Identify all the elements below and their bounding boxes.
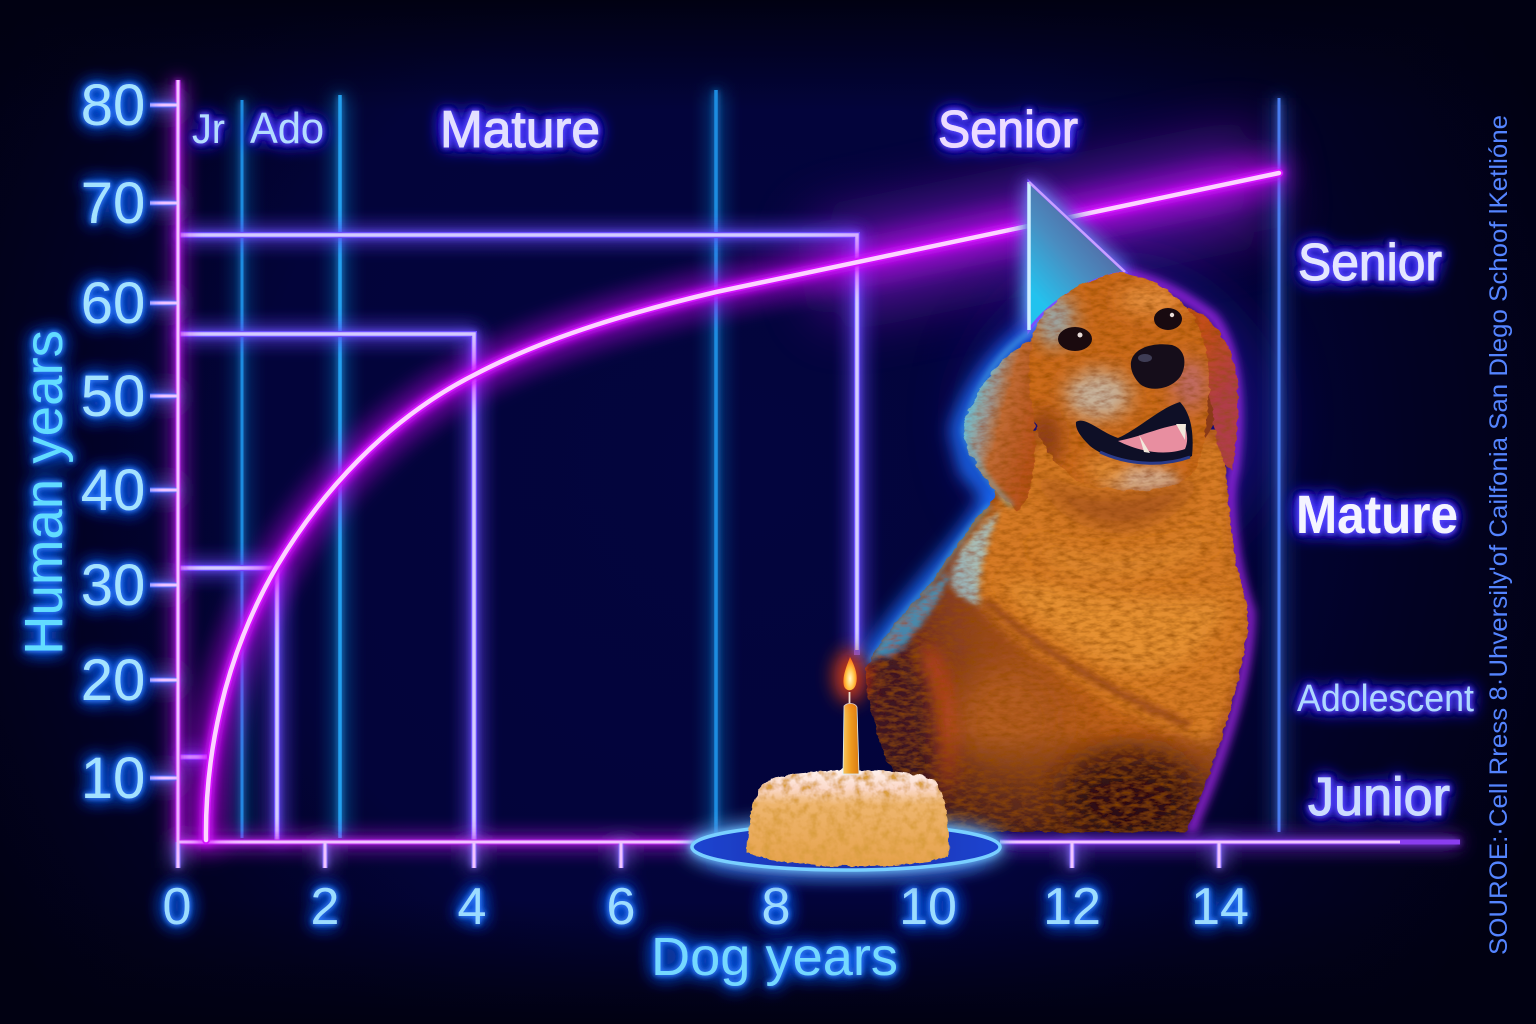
dog body bbox=[865, 430, 1249, 834]
right ear bbox=[1187, 308, 1238, 470]
age bracket lines bbox=[178, 235, 857, 840]
right stage labels: Senior bbox=[1298, 234, 1442, 292]
right stage labels: Junior bbox=[1308, 767, 1450, 827]
dog head bbox=[963, 265, 1238, 510]
x axis numbers: 14 bbox=[1191, 878, 1249, 936]
x axis numbers: 2 bbox=[311, 878, 339, 936]
top stage labels bbox=[192, 101, 1078, 159]
dog with party hat bbox=[850, 182, 1270, 843]
cake on plate bbox=[692, 650, 1000, 878]
x axis numbers: 10 bbox=[899, 878, 957, 936]
eye left bbox=[1058, 327, 1092, 351]
rim glow: blue on left bbox=[868, 273, 1120, 665]
axes bbox=[150, 80, 1460, 868]
top stage labels: Jr bbox=[192, 105, 225, 152]
y axis numbers: 40 bbox=[81, 458, 145, 523]
y axis numbers: 70 bbox=[81, 171, 145, 236]
party hat bbox=[1029, 182, 1125, 330]
right stage labels: Mature bbox=[1296, 485, 1458, 545]
top stage labels: Ado bbox=[250, 104, 324, 153]
x axis title: Dog years bbox=[651, 927, 898, 987]
nose bbox=[1131, 344, 1184, 389]
right stage labels bbox=[1296, 234, 1474, 827]
head backing bbox=[1030, 315, 1220, 475]
y axis numbers: 10 bbox=[81, 746, 145, 811]
y axis numbers: 30 bbox=[81, 553, 145, 618]
rim glow: purple on right bbox=[1120, 273, 1250, 832]
pale rim on left ear and shoulder bbox=[870, 332, 1030, 662]
x axis numbers: 6 bbox=[607, 878, 635, 936]
purple haze along curve bbox=[820, 180, 1265, 272]
y axis numbers: 20 bbox=[81, 648, 145, 713]
x axis numbers: 12 bbox=[1043, 878, 1101, 936]
cake body bbox=[747, 770, 949, 866]
y axis title: Human years bbox=[14, 330, 74, 655]
mouth bbox=[1076, 402, 1193, 464]
top vignette bbox=[0, 0, 1536, 110]
x axis numbers: 4 bbox=[458, 878, 486, 936]
plate bbox=[692, 824, 1000, 878]
y axis numbers bbox=[81, 73, 145, 811]
x axis numbers bbox=[163, 878, 1249, 936]
x axis numbers: 0 bbox=[163, 878, 191, 936]
top stage labels: Senior bbox=[938, 101, 1078, 159]
source note: SOUROE:·Cell Rress 8·Uhversily'of Cailfonia San Dlego Schoof lKetlióne bbox=[1485, 115, 1513, 955]
left ear bbox=[963, 335, 1042, 510]
x axis numbers: 8 bbox=[762, 878, 790, 936]
eye right bbox=[1154, 308, 1182, 330]
y axis numbers: 50 bbox=[81, 364, 145, 429]
aging curve bbox=[206, 173, 1279, 840]
top stage labels: Mature bbox=[440, 101, 600, 159]
candle bbox=[843, 703, 859, 774]
right stage labels: Adolescent bbox=[1297, 678, 1474, 720]
flame bbox=[834, 650, 866, 703]
blue haze around dog bbox=[970, 270, 1270, 570]
y axis numbers: 80 bbox=[81, 73, 145, 138]
age bracket bright core bbox=[178, 235, 857, 840]
bottom vignette bbox=[0, 900, 1536, 1024]
vertical stage dividers bbox=[242, 90, 1279, 838]
neck shadow under jaw bbox=[1035, 470, 1195, 528]
y axis numbers: 60 bbox=[81, 271, 145, 336]
axes bright core bbox=[150, 80, 1400, 868]
